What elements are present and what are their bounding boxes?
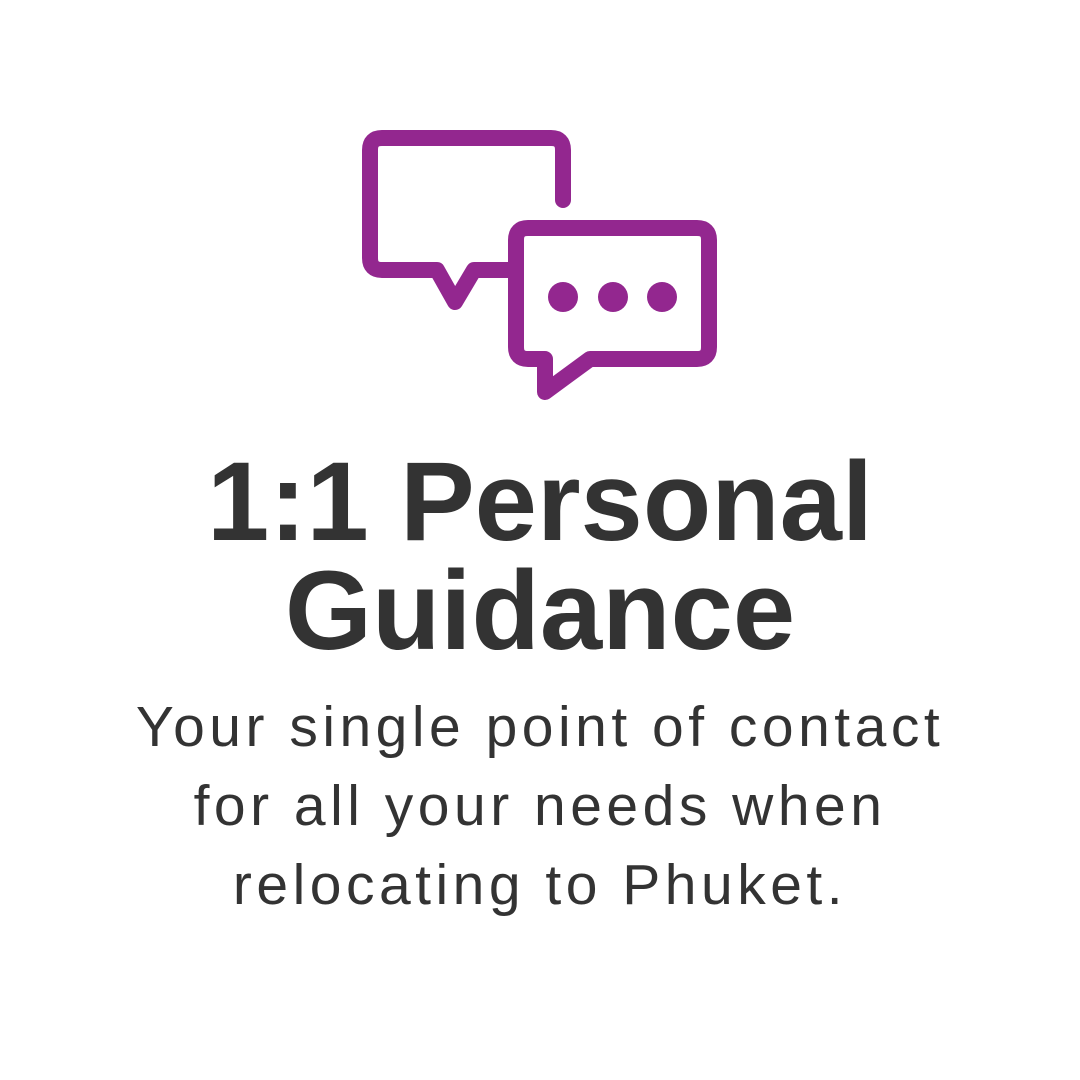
title: Guidance [285, 548, 795, 673]
title [207, 439, 873, 673]
subtitle text: Your single point of contact [136, 695, 944, 759]
subtitle text [136, 695, 944, 917]
subtitle text: for all your needs when [194, 774, 886, 838]
icon: chat bubbles [362, 130, 717, 400]
subtitle text: relocating to Phuket. [233, 853, 847, 917]
title: 1:1 Personal [207, 439, 873, 564]
